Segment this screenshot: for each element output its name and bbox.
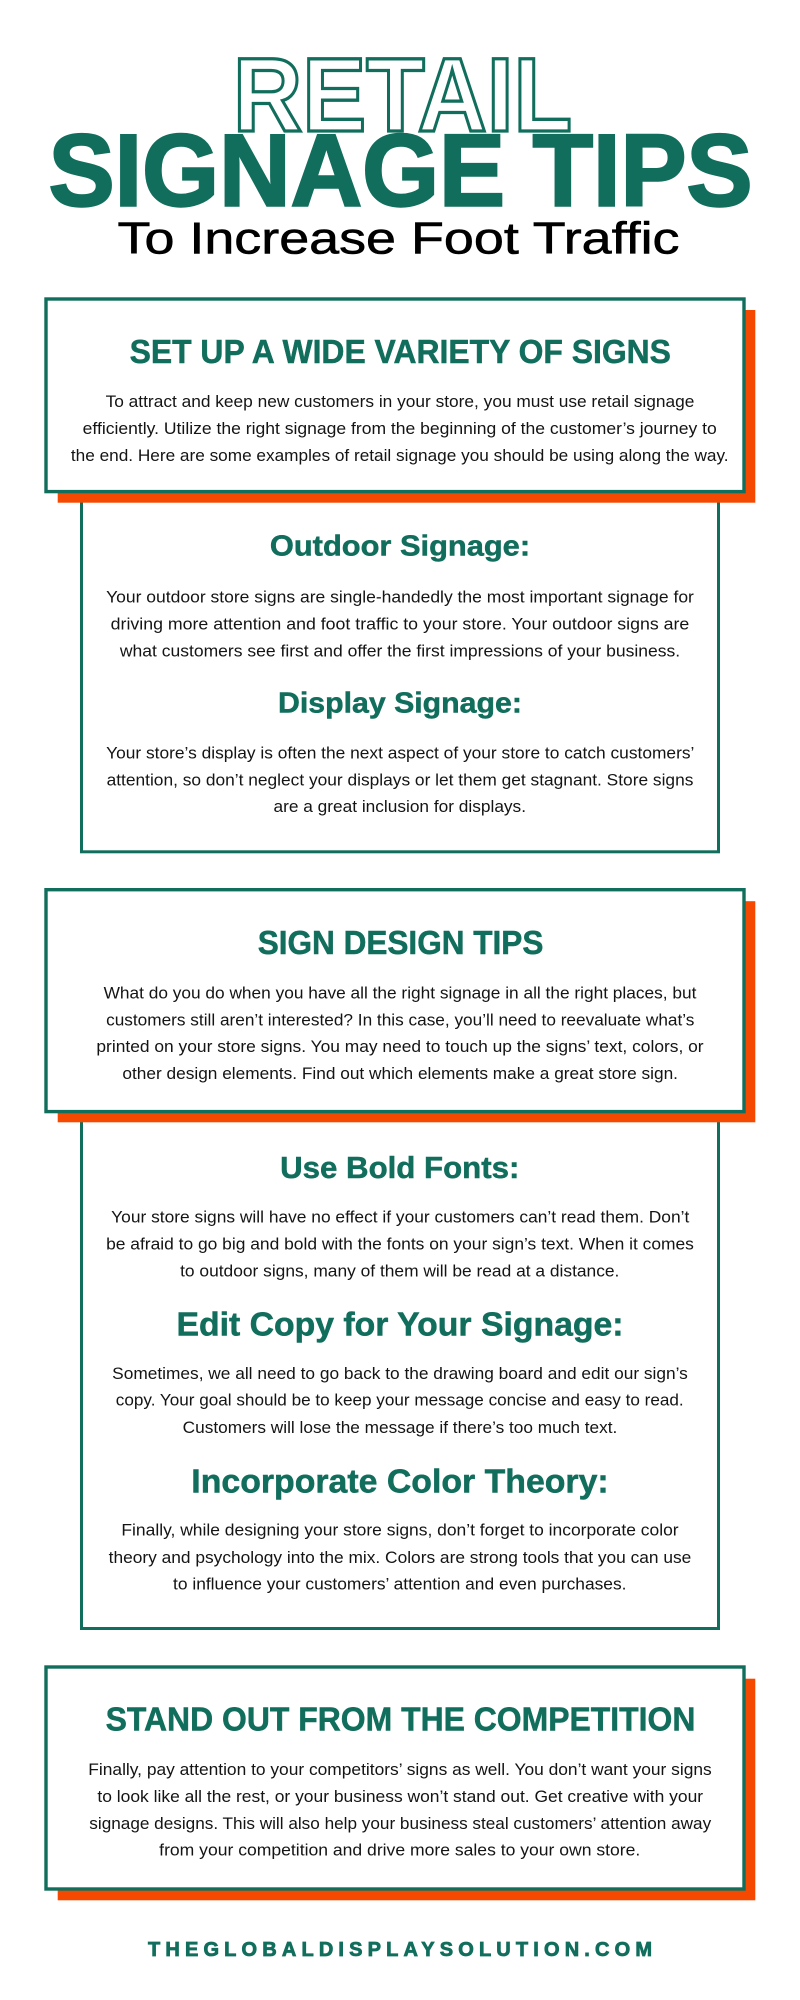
heading: Set up a wide variety of signs: SET UP A WIDE VARIETY OF SIGNS	[130, 333, 671, 370]
text: bold fonts body: be afraid to go big and bold with the fonts on your sign’s text. When it comes	[106, 1234, 694, 1253]
heading: Incorporate Color Theory: Incorporate Color Theory:	[191, 1462, 609, 1500]
text: bold fonts body: Your store signs will have no effect if your customers can’t read them. Don’t	[111, 1208, 690, 1227]
text: sign design body: customers still aren’t interested? In this case, you’ll need to reevaluate what’s	[106, 1010, 694, 1029]
text: display signage body	[106, 743, 694, 816]
text: sign design body: printed on your store signs. You may need to touch up the signs’ text, colors, or	[96, 1037, 704, 1056]
heading: Edit Copy: Edit Copy for Your Signage:	[176, 1305, 624, 1342]
text: bold fonts body	[106, 1208, 694, 1280]
heading: Stand out from the competition: STAND OUT FROM THE COMPETITION	[106, 1701, 695, 1738]
text: edit copy body: Sometimes, we all need to go back to the drawing board and edit our sign’s	[112, 1364, 688, 1383]
text: color theory body: to influence your customers’ attention and even purchases.	[173, 1575, 626, 1594]
text: color theory body: Finally, while designing your store signs, don’t forget to incorporate color	[121, 1521, 679, 1540]
heading: Sign design tips: SIGN DESIGN TIPS	[258, 924, 543, 961]
text: competition body: to look like all the rest, or your business won’t stand out. Get creative with your	[97, 1787, 704, 1806]
text: edit copy body	[112, 1364, 688, 1437]
panel: outdoor and display signage	[82, 480, 718, 852]
heading: Use Bold Fonts: Use Bold Fonts:	[280, 1150, 519, 1185]
title: RETAIL outlined: RETAIL	[233, 37, 572, 154]
text: display signage body: attention, so don’t neglect your displays or let them get stagnant. Store signs	[107, 770, 693, 789]
text: sign design body: other design elements. Find out which elements make a great store sign.	[122, 1064, 678, 1083]
footer website: THEGLOBALDISPLAYSOLUTION.COM	[148, 1939, 652, 1961]
subtitle: To Increase Foot Traffic	[118, 214, 680, 263]
text: sign design body: What do you do when you have all the right signage in all the right places, but	[104, 983, 697, 1002]
text: sign design body	[96, 983, 704, 1083]
text: edit copy body: Customers will lose the message if there’s too much text.	[183, 1418, 617, 1437]
text: bold fonts body: to outdoor signs, many of them will be read at a distance.	[180, 1261, 619, 1280]
text: outdoor signage body	[106, 587, 694, 660]
text: edit copy body: copy. Your goal should be to keep your message concise and easy to read.	[116, 1391, 684, 1410]
title block	[49, 37, 753, 263]
heading: Outdoor Signage: Outdoor Signage:	[270, 530, 530, 562]
text: competition body: Finally, pay attention to your competitors’ signs as well. You don’t want your signs	[88, 1760, 712, 1779]
text: intro body: To attract and keep new customers in your store, you must use retail signage	[106, 392, 694, 411]
panel: sign design tips	[46, 890, 755, 1122]
text: color theory body: theory and psychology into the mix. Colors are strong tools that you can use	[109, 1548, 691, 1567]
text: color theory body	[109, 1521, 691, 1594]
text: outdoor signage body: driving more attention and foot traffic to your store. Your outdoor signs are	[111, 614, 689, 633]
panel: bold fonts, copy and color theory	[82, 1100, 718, 1628]
text: competition body: signage designs. This will also help your business steal customers’ attention away	[89, 1814, 712, 1833]
text: display signage body: are a great inclusion for displays.	[274, 797, 526, 816]
text: competition body: from your competition and drive more sales to your own store.	[159, 1841, 640, 1860]
title: SIGNAGE TIPS: SIGNAGE TIPS	[49, 114, 753, 228]
text: intro body: efficiently. Utilize the right signage from the beginning of the customer’s journey to	[83, 419, 717, 438]
panel: set up a wide variety of signs	[46, 299, 755, 503]
text: intro body: the end. Here are some examples of retail signage you should be using along the way.	[71, 446, 729, 465]
text: intro body	[71, 392, 729, 465]
heading: Display Signage: Display Signage:	[278, 688, 522, 720]
text: display signage body: Your store’s display is often the next aspect of your store to catch customers’	[106, 743, 694, 762]
text: outdoor signage body: what customers see first and offer the first impressions of your business.	[119, 641, 680, 660]
text: outdoor signage body: Your outdoor store signs are single-handedly the most important signage for	[106, 587, 694, 606]
panel: stand out from the competition	[46, 1667, 755, 1900]
text: competition body	[88, 1760, 712, 1860]
